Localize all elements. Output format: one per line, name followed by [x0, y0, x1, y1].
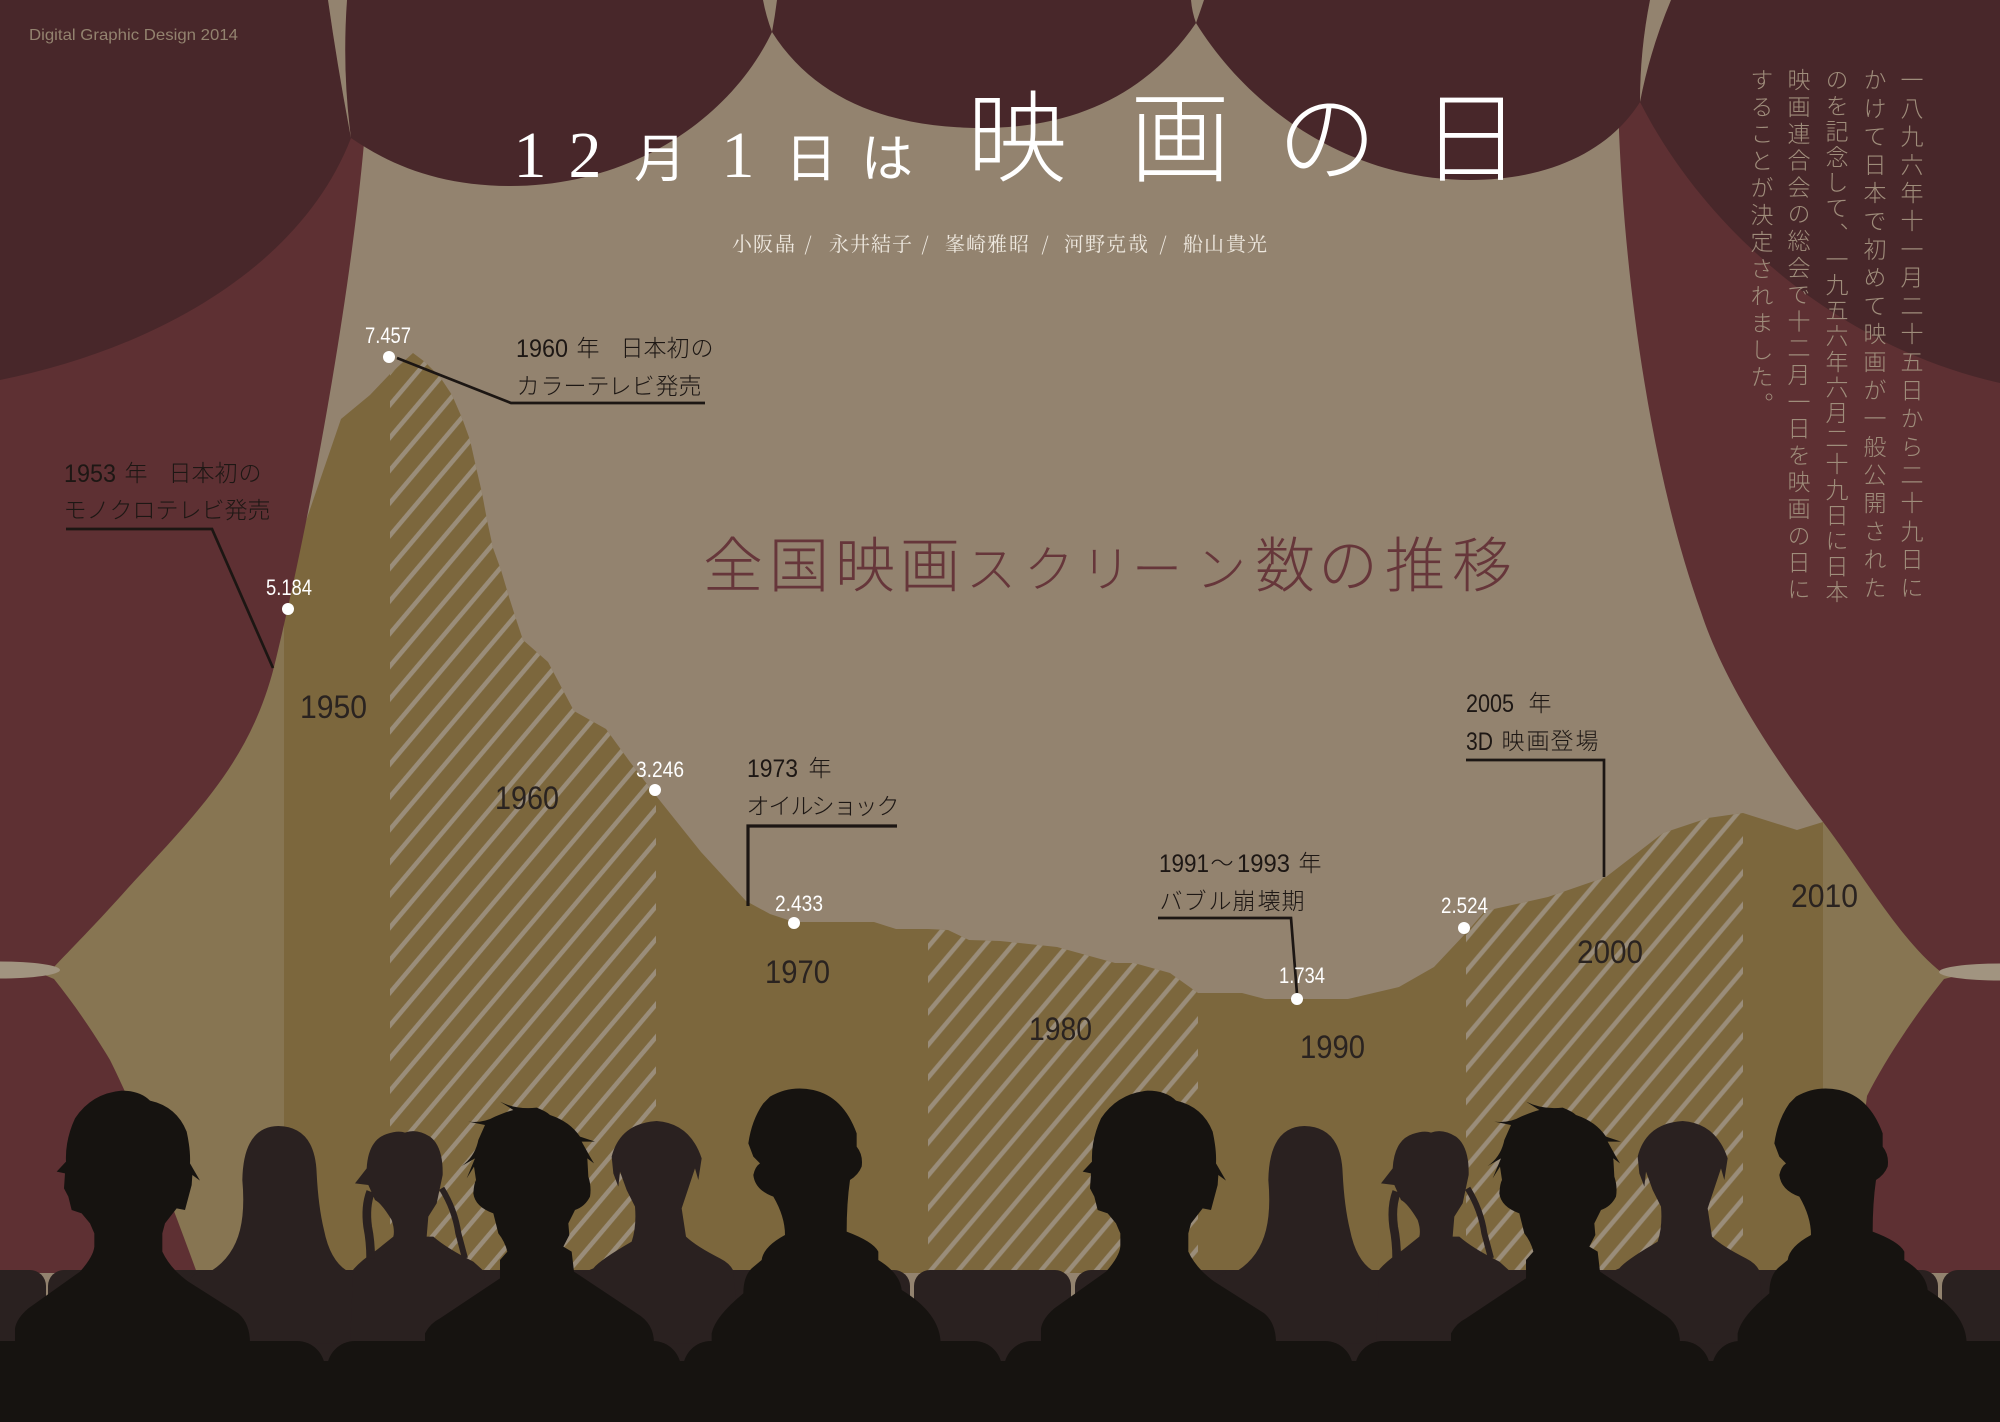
annotation: 2005: 映画登場	[1502, 728, 1598, 754]
swag 2	[345, 0, 772, 186]
annotation: 2005: 2005	[1466, 690, 1514, 718]
curtain tie right	[1939, 964, 2000, 980]
annotation: 2005: 3D	[1466, 728, 1493, 756]
decade labels: 1990	[1300, 1029, 1365, 1065]
vertical description text: のを記念して、一九五六年六月二十九日に日本	[1820, 68, 1854, 606]
chart area fill	[284, 353, 1823, 1273]
title: date: 12	[514, 119, 602, 192]
title: main: 映画の日	[967, 84, 1521, 196]
data point 1.734	[1279, 963, 1325, 1005]
annotation: 2005	[1466, 690, 1604, 877]
annotation: 1953: 年日本初の	[124, 460, 262, 486]
decade labels: 1960	[495, 780, 559, 816]
swag 1	[0, 0, 351, 380]
vertical description text: 一八九六年十一月二十五日から二十九日に	[1895, 68, 1929, 604]
annotation: 1991-1993: バブル崩壊期	[1160, 888, 1304, 914]
title: date: 月	[634, 132, 686, 189]
annotation: 1960: カラーテレビ発売	[516, 373, 702, 399]
annotation: 1991-1993: 1993	[1237, 850, 1290, 878]
annotation: 1973	[746, 755, 900, 906]
data point 5.184: 5.184	[266, 575, 312, 600]
data point 2.524: 2.524	[1441, 893, 1488, 918]
decade labels: 1950	[300, 689, 367, 725]
data point 3.246	[636, 757, 684, 796]
back row: long hair, twin tails	[188, 1126, 493, 1343]
data point 2.433	[775, 891, 823, 929]
credit: Digital Graphic Design 2014	[29, 27, 238, 44]
audience silhouettes group 2b	[1451, 1088, 1967, 1343]
annotation: 1991-1993	[1158, 850, 1322, 994]
annotation: 1960: 年日本初の	[576, 335, 714, 361]
back row seats	[0, 1270, 2000, 1422]
annotation: 1953	[64, 460, 273, 668]
swag 4	[1196, 0, 1650, 180]
swag 3	[772, 0, 1196, 128]
chart title: 全国映画	[703, 533, 960, 600]
left curtain	[0, 0, 364, 1273]
title: date: 1	[722, 119, 754, 192]
decade labels: 1970	[765, 954, 830, 990]
data point 1.734: 1.734	[1279, 963, 1325, 988]
chart margin left	[0, 621, 284, 1273]
data point 5.184	[266, 575, 312, 615]
decade labels: 2010	[1791, 878, 1858, 914]
annotation: 1973: オイルショック	[746, 793, 900, 819]
annotation: 1960	[397, 335, 714, 403]
chart margin right	[1823, 822, 2000, 1273]
data point 2.433: 2.433	[775, 891, 823, 916]
front row: hooded	[712, 1088, 941, 1343]
chart title: スクリーン	[966, 542, 1246, 598]
annotation: 1991-1993: 〜	[1210, 850, 1234, 876]
decade labels: 1980	[1029, 1011, 1092, 1047]
vertical description text: することが決定されました。	[1745, 68, 1779, 419]
annotation: 2005: 年	[1528, 690, 1552, 716]
audience silhouettes group 2	[1041, 1091, 1519, 1343]
front row: shaggy hair	[15, 1091, 250, 1343]
decade labels: 2000	[1577, 934, 1643, 970]
annotation: 1973: 年	[808, 755, 832, 781]
right curtain	[1619, 0, 2000, 1273]
title: date: 日は	[785, 132, 913, 189]
curtain tie left	[0, 962, 60, 978]
data point 7.457: 7.457	[365, 323, 411, 348]
data point 3.246: 3.246	[636, 757, 684, 782]
annotation: 1953: モノクロテレビ発売	[64, 497, 270, 523]
annotation: 1973: 1973	[747, 755, 798, 783]
data point 2.524	[1441, 893, 1488, 934]
authors: 小阪晶/永井結子/峯崎雅昭/河野克哉/船山貴光	[732, 228, 1267, 257]
swag gap right	[1640, 0, 1671, 102]
area chart: screen counts	[0, 340, 2000, 1273]
audience silhouettes group 1	[15, 1091, 493, 1343]
swag gap left	[328, 0, 351, 138]
swag 5	[1640, 0, 2000, 383]
data point 7.457	[365, 323, 411, 363]
back row: short hair	[580, 1121, 740, 1343]
annotation: 1960: 1960	[516, 335, 568, 363]
vertical description text	[1745, 68, 1929, 606]
annotation: 1953: 1953	[64, 460, 116, 488]
valance swags	[0, 0, 2000, 383]
decade labels	[300, 689, 1858, 1065]
front row: spiky hair	[425, 1102, 654, 1343]
annotation: 1991-1993: 1991	[1159, 850, 1209, 878]
annotation: 1991-1993: 年	[1298, 850, 1322, 876]
vertical description text: かけて日本で初めて映画が一般公開された	[1858, 68, 1892, 604]
striped decade bands	[390, 340, 1743, 1273]
audience silhouettes group 1b	[425, 1088, 941, 1343]
vertical description text: 映画連合会の総会で十二月一日を映画の日に	[1782, 68, 1816, 604]
front row seats	[0, 1341, 2000, 1422]
chart title: 数の推移	[1255, 533, 1512, 600]
